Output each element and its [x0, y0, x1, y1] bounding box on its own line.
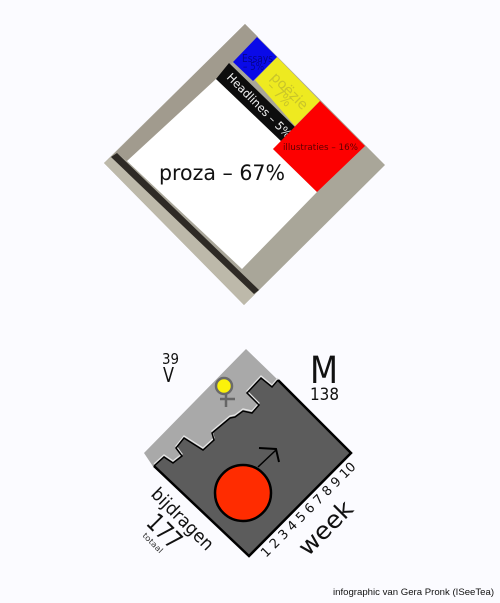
credit: infographic van Gera Pronk (ISeeTea): [333, 587, 494, 598]
label: total: totaal: [141, 531, 165, 555]
icon: female symbol: [216, 378, 235, 407]
label: male count: M: [310, 349, 338, 392]
label: female count: V: [163, 363, 174, 387]
outline: male area edges: [154, 380, 351, 556]
label: male count: 138: [310, 385, 339, 405]
segment: illustraties: illustraties – 16%: [283, 143, 358, 153]
label: female count: 39: [162, 350, 179, 368]
segment: poezie: [255, 57, 320, 126]
segment: proza: [127, 79, 317, 269]
label: proza: proza – 67%: [159, 161, 285, 185]
segment: poezie: – 7%: [263, 79, 295, 110]
segment: essays: – 5%: [243, 61, 264, 73]
segment: essays: [233, 37, 277, 81]
segment: illustraties: [273, 101, 365, 192]
segment: poezie: poëzie: [267, 70, 311, 113]
panel: content share diamond: [104, 24, 385, 305]
segment: essays: Essays: [242, 53, 273, 65]
axis: week numbers: 1 2 3 4 5 6 7 8 9 10: [258, 460, 359, 561]
area: male contributions: [154, 378, 351, 556]
icon: male symbol: [215, 448, 279, 521]
label: week: week: [292, 495, 359, 561]
outline: stepped boundary halo: [154, 376, 278, 464]
segment: headlines: Headlines – 5%: [224, 70, 295, 141]
panel: contributions diamond: [141, 349, 359, 561]
frame: photographic border: [104, 24, 385, 305]
outline: stepped boundary: [154, 378, 278, 466]
label: female count: [162, 350, 179, 387]
frame: dark stripe: [111, 153, 259, 294]
label: bijdragen: bijdragen: [146, 484, 218, 555]
label: total: 177: [141, 508, 188, 555]
area: female contributions: [144, 349, 278, 468]
